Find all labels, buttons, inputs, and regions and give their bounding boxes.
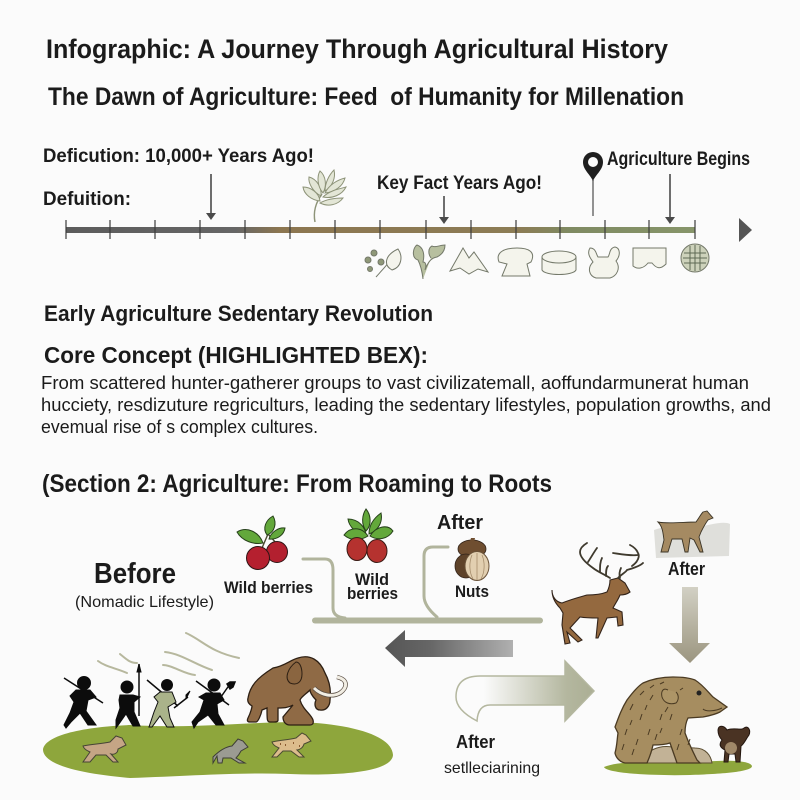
arrow: timeline direction <box>739 218 752 242</box>
hunter one <box>64 676 103 728</box>
mammoth <box>247 657 346 725</box>
icon: mountains <box>450 248 488 274</box>
text block: core concept body: evemual rise of s complex cultures. <box>41 416 318 437</box>
icon: round grid basket <box>681 244 709 272</box>
timeline label: key fact: Key Fact Years Ago! <box>377 173 542 194</box>
heading: section 2: (Section 2: Agriculture: From Roaming to Roots <box>42 470 552 498</box>
timeline label: defuition: Defuition: <box>43 189 131 210</box>
before caption: (Nomadic Lifestyle) <box>75 594 214 611</box>
timeline bar <box>66 220 695 239</box>
arrow: marker three <box>665 174 675 224</box>
label: after top: After <box>437 512 483 534</box>
hunter three <box>147 679 190 727</box>
grass patch <box>604 761 752 775</box>
illustration: nomadic hunting scene <box>43 633 393 778</box>
arrow: right curved <box>456 661 594 721</box>
hunter two <box>116 664 141 728</box>
icon: nuts <box>455 538 489 580</box>
small creature <box>718 726 750 762</box>
label: after deer: After <box>668 559 705 579</box>
icon row: timeline eras <box>365 244 709 279</box>
text block: core concept body: From scattered hunter-gatherer groups to vast civilizatemall, aoffundarmunerat human <box>41 372 749 393</box>
label: wild berries stacked <box>347 570 398 603</box>
illustration: small deer in grey box <box>654 511 730 558</box>
label: nuts: Nuts <box>455 583 489 601</box>
heading: early agriculture: Early Agriculture Sedentary Revolution <box>44 301 433 326</box>
connectors: food to timeline bar <box>303 547 540 620</box>
arrow: marker one <box>206 174 216 220</box>
arrow: down <box>669 587 710 663</box>
timeline label: deficution: Deficution: 10,000+ Years Ago! <box>43 146 314 167</box>
mound <box>643 747 712 763</box>
illustration: settled animals <box>604 677 752 775</box>
icon: plant <box>413 245 445 279</box>
animal: stag <box>552 543 643 644</box>
panel: before label <box>75 558 214 611</box>
icon: basket <box>633 248 666 268</box>
wind lines <box>98 633 239 675</box>
arrow: marker two <box>439 196 449 224</box>
timeline label: agriculture begins: Agriculture Begins <box>607 149 750 170</box>
icon: round cake <box>542 251 576 274</box>
text block: core concept body: hucciety, resdizuture regriculturs, leading the sedentary lifestyles, population growths, and <box>41 394 771 415</box>
label: wild berries stacked: berries <box>347 584 398 603</box>
animal: boar <box>83 736 126 762</box>
ground <box>43 722 393 778</box>
bear <box>615 677 727 763</box>
arrow: left grey <box>385 630 513 667</box>
animal: spotted boar <box>272 733 311 757</box>
label: wild berries: Wild berries <box>224 578 313 597</box>
text block: core concept body <box>41 372 771 437</box>
panel: timeline <box>43 146 752 279</box>
animal: grey boar <box>213 739 248 763</box>
icon: rabbit pack <box>589 247 619 278</box>
icon: herbs and bulb <box>365 249 401 277</box>
label: wild berries stacked: Wild <box>355 570 389 589</box>
before heading: Before <box>94 558 176 590</box>
subtitle: The Dawn of Agriculture: Feed of Humanity for Millenation <box>48 83 684 111</box>
title: Infographic: A Journey Through Agricultural History <box>46 34 668 64</box>
label: settled farming: setlleciarining <box>444 760 540 777</box>
hunter four <box>192 679 235 728</box>
icon: location pin <box>583 152 603 216</box>
label: after middle: After <box>456 732 495 752</box>
icon: wild berries oval <box>344 509 393 562</box>
heading: core concept: Core Concept (HIGHLIGHTED BEX): <box>44 342 428 368</box>
icon: hut <box>498 248 533 276</box>
icon: palm leaf <box>303 170 346 222</box>
icon: wild berries round <box>237 516 288 570</box>
